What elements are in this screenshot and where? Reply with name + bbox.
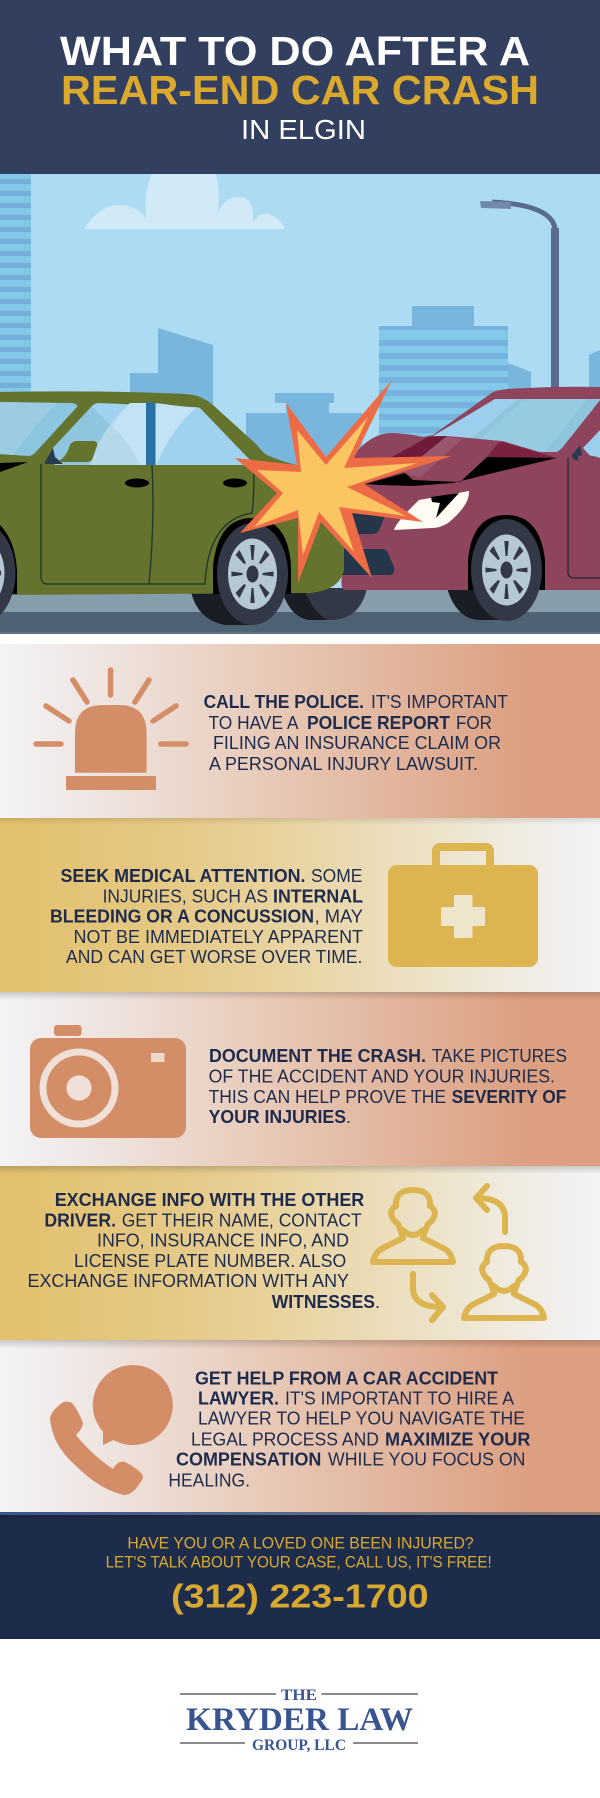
- text: document the crash: SEVERITY OF: [452, 1087, 566, 1107]
- text: document the crash: THIS CAN HELP PROVE THE: [209, 1087, 446, 1107]
- red car body: [341, 387, 600, 590]
- icon: camera: [30, 1025, 186, 1138]
- text: exchange info: WITNESSES: [272, 1292, 375, 1312]
- green car front wheel: [213, 518, 291, 594]
- arrow: down right: [413, 1274, 443, 1320]
- text: get help: GET HELP FROM A CAR ACCIDENT: [195, 1368, 498, 1388]
- text: call the police: POLICE REPORT: [307, 713, 450, 733]
- green car mirror: [45, 448, 63, 464]
- footer call to action: [0, 1512, 600, 1639]
- text: call the police: A PERSONAL INJURY LAWSUIT.: [209, 754, 478, 774]
- green car front window: [50, 403, 251, 465]
- green car rear window: [0, 402, 77, 456]
- icon: siren: [36, 670, 186, 790]
- sky: [0, 174, 600, 634]
- red car headlight: [394, 491, 469, 530]
- red car hood: [390, 436, 447, 470]
- text: seek medical attention: INTERNAL: [273, 886, 363, 906]
- green car: [0, 391, 344, 625]
- text: exchange info: LICENSE PLATE NUMBER. ALSO: [74, 1251, 346, 1271]
- text: seek medical attention: INJURIES, SUCH AS: [103, 886, 268, 906]
- text: seek medical attention: , MAY: [315, 906, 363, 926]
- icon: phone with speech bubble: [50, 1365, 173, 1495]
- text: document the crash: [209, 1046, 567, 1127]
- logo: The Kryder Law Group: THE: [281, 1687, 317, 1704]
- text: get help: WHILE YOU FOCUS ON: [328, 1449, 525, 1469]
- text: exchange info: [28, 1190, 380, 1312]
- green car body: [0, 391, 344, 595]
- green car door handles: [125, 478, 149, 488]
- call to action text: HAVE YOU OR A LOVED ONE BEEN INJURED?: [127, 1533, 474, 1552]
- text: exchange info: GET THEIR NAME, CONTACT: [122, 1210, 362, 1230]
- logo: The Kryder Law Group: GROUP, LLC: [252, 1737, 346, 1754]
- text: call the police: FILING AN INSURANCE CLAIM OR: [213, 733, 501, 753]
- red car side window and mirror: [583, 430, 600, 460]
- red car far tyre: [281, 588, 367, 620]
- text: call the police: TO HAVE A: [208, 713, 298, 733]
- text: call the police: IT'S IMPORTANT: [371, 692, 508, 712]
- green car rear tyre shadow: [191, 592, 252, 625]
- text: get help: LAWYER.: [198, 1388, 279, 1408]
- title line: what to do after a: WHAT TO DO AFTER A: [60, 28, 530, 74]
- text: exchange info: EXCHANGE INFO WITH THE OTHER: [55, 1190, 364, 1210]
- impact star: [235, 380, 452, 583]
- text: get help: IT'S IMPORTANT TO HIRE A: [285, 1388, 514, 1408]
- text: seek medical attention: BLEEDING OR A CONCUSSION: [50, 906, 314, 926]
- person two: [464, 1246, 544, 1318]
- panel: call the police: [0, 644, 600, 818]
- text: seek medical attention: [50, 866, 363, 967]
- text: seek medical attention: SEEK MEDICAL ATTENTION.: [60, 866, 306, 886]
- panel: document the crash: [0, 992, 600, 1166]
- green car door lines: [41, 464, 254, 584]
- text: get help: [168, 1368, 530, 1490]
- text: get help: LEGAL PROCESS AND: [191, 1429, 379, 1449]
- sidewalk and road: [0, 590, 600, 634]
- red car windshield: [433, 399, 600, 452]
- logo: The Kryder Law Group: KRYDER LAW: [186, 1702, 413, 1738]
- panel: get help from a lawyer: [0, 1340, 600, 1512]
- text: seek medical attention: AND CAN GET WORSE OVER TIME.: [66, 947, 362, 967]
- text: get help: COMPENSATION: [176, 1449, 321, 1469]
- text: document the crash: .: [346, 1107, 351, 1127]
- text: document the crash: TAKE PICTURES: [432, 1046, 567, 1066]
- call to action text line two: LET'S TALK ABOUT YOUR CASE, CALL US, IT'S FREE!: [106, 1552, 492, 1571]
- red car door line: [568, 458, 600, 578]
- text: document the crash: DOCUMENT THE CRASH.: [209, 1046, 426, 1066]
- arrow: up left: [476, 1186, 505, 1232]
- panel: seek medical attention: [0, 818, 600, 992]
- panel: exchange info: [0, 1166, 600, 1340]
- title line: rear-end car crash: REAR-END CAR CRASH: [61, 67, 539, 113]
- text: get help: MAXIMIZE YOUR: [385, 1429, 530, 1449]
- text: get help: LAWYER TO HELP YOU NAVIGATE THE: [198, 1408, 525, 1428]
- cloud: [84, 174, 285, 229]
- text: seek medical attention: NOT BE IMMEDIATELY APPARENT: [74, 927, 363, 947]
- subtitle: in Elgin: IN ELGIN: [241, 114, 366, 145]
- street lamp: [480, 201, 559, 398]
- text: call the police: CALL THE POLICE.: [204, 692, 364, 712]
- red car wheel: [468, 515, 545, 590]
- green car rear wheel: [0, 525, 17, 594]
- text: document the crash: YOUR INJURIES: [209, 1107, 346, 1127]
- text: seek medical attention: SOME: [311, 866, 362, 886]
- text: exchange info: INFO, INSURANCE INFO, AND: [97, 1230, 349, 1250]
- text: call the police: FOR: [456, 713, 492, 733]
- text: exchange info: EXCHANGE INFORMATION WITH ANY: [28, 1271, 349, 1291]
- skyline buildings: [0, 174, 600, 480]
- header banner: [0, 0, 600, 174]
- phone number: (312) 223-1700: [171, 1577, 429, 1614]
- red car grille: [350, 498, 389, 534]
- text: document the crash: OF THE ACCIDENT AND YOUR INJURIES.: [209, 1066, 555, 1086]
- red car: [281, 387, 600, 621]
- text: exchange info: DRIVER.: [44, 1210, 116, 1230]
- text: get help: HEALING.: [168, 1470, 250, 1490]
- person one: [373, 1190, 453, 1262]
- icon: first aid kit: [388, 847, 538, 967]
- text: exchange info: .: [375, 1292, 380, 1312]
- text: call the police: [204, 692, 508, 774]
- logo: The Kryder Law Group: [180, 1687, 418, 1754]
- illustration: rear-end crash street scene: [0, 174, 600, 634]
- icon: two people exchanging info: [373, 1186, 544, 1320]
